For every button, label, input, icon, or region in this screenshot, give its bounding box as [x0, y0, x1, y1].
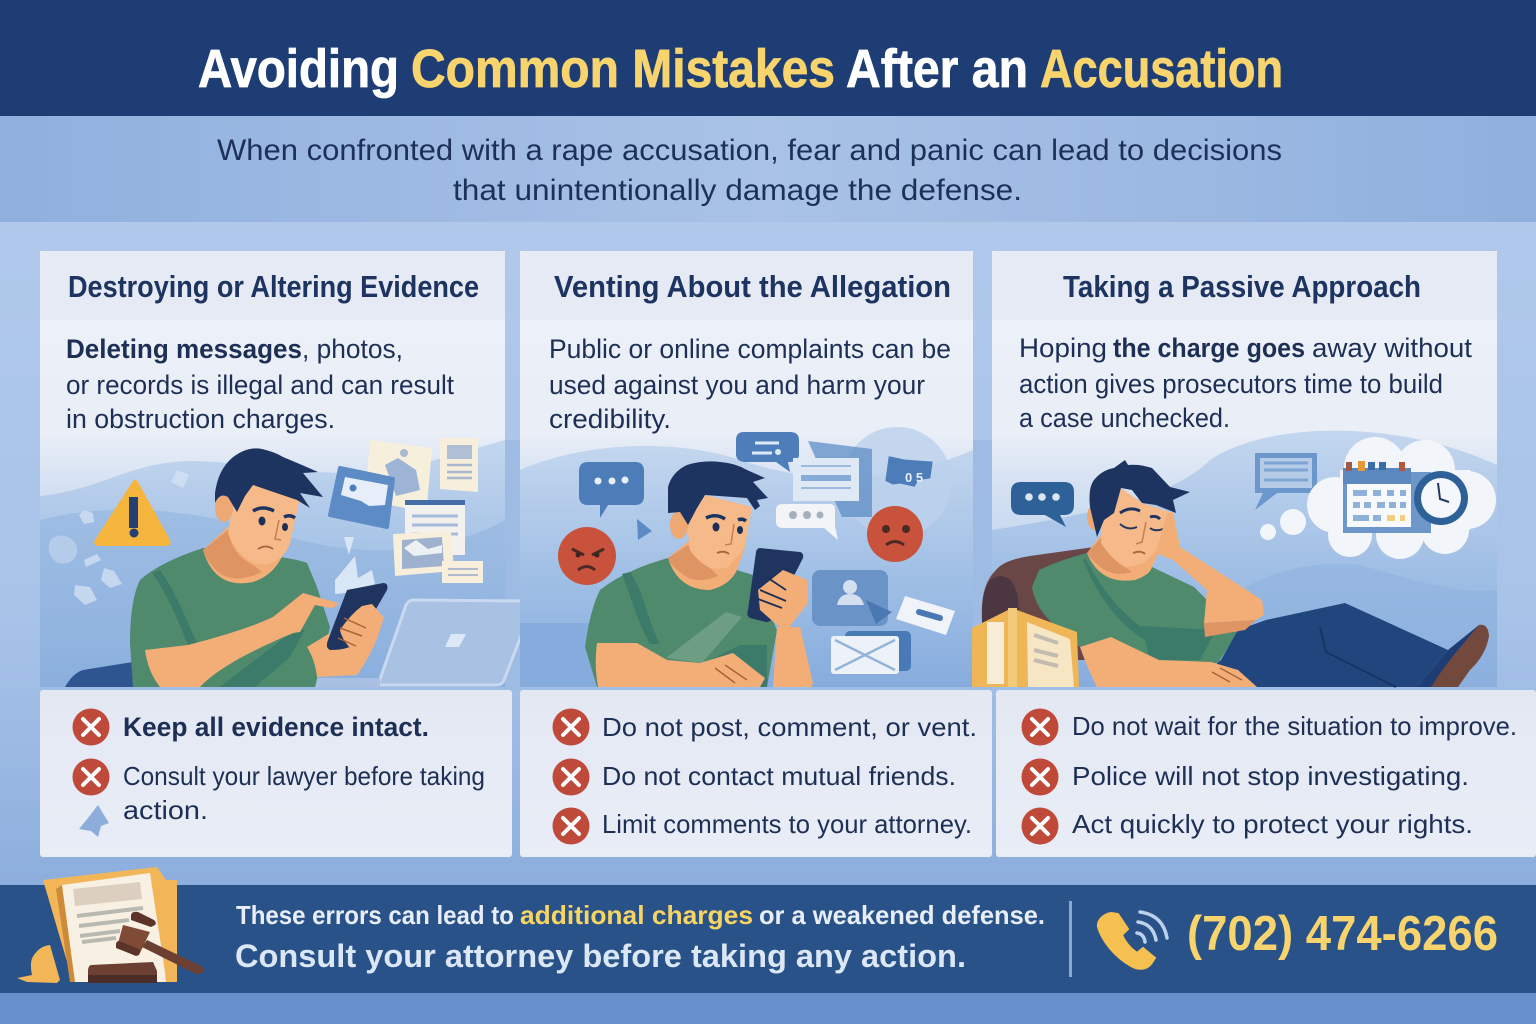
icon: cross	[552, 808, 590, 844]
body text	[1019, 333, 1472, 433]
icon: sad face	[867, 506, 923, 562]
action text	[123, 761, 485, 825]
icon: burst of fragments	[335, 537, 375, 594]
intro band	[0, 116, 1536, 222]
body text: , photos,	[302, 334, 403, 364]
person resting head on hand	[982, 460, 1489, 687]
panel: venting about the allegation	[520, 251, 973, 687]
icon: phone	[1098, 912, 1167, 969]
action text: Do not wait for the situation to improve.	[1072, 711, 1517, 741]
icon: cross	[1022, 708, 1058, 746]
action text: Police will not stop investigating.	[1072, 761, 1469, 791]
icon: small heart shape	[637, 519, 652, 540]
icon: legal document and gavel	[17, 867, 204, 983]
icon: warning triangle	[94, 480, 170, 546]
body text: used against you and harm your	[549, 370, 925, 400]
panel: second action list	[520, 690, 992, 857]
icon: cross	[1022, 758, 1058, 796]
icon: top message bubble	[736, 432, 799, 472]
body text: away without	[1312, 333, 1472, 363]
heading: Venting About the Allegation	[554, 269, 951, 304]
header band	[0, 0, 1536, 116]
icon: faded scrap	[79, 805, 109, 837]
icon: cross	[72, 758, 110, 796]
icon: text bubble glitch: 0 5	[905, 470, 923, 485]
icon: profile card	[812, 570, 892, 626]
icon: white bubble	[776, 504, 838, 540]
icon: cross	[1022, 808, 1058, 844]
panel: third action list	[996, 690, 1536, 857]
illustration backdrop	[40, 440, 505, 687]
title: Accusation	[1040, 39, 1283, 99]
footer message: or a weakened defense.	[759, 900, 1045, 930]
body text: the charge goes	[1113, 333, 1305, 363]
body text: or records is illegal and can result	[66, 370, 454, 400]
footer message: additional charges	[520, 900, 753, 930]
icon: cross	[552, 758, 590, 796]
title: After an	[846, 39, 1028, 99]
body text	[66, 334, 454, 434]
background circle	[842, 427, 952, 537]
body text: action gives prosecutors time to build	[1019, 369, 1443, 399]
icon: angry face	[558, 527, 616, 585]
body text	[549, 334, 951, 434]
footer message	[235, 900, 1045, 974]
icon: envelope	[831, 631, 911, 674]
action text: Act quickly to protect your rights.	[1072, 809, 1473, 839]
icon: cross	[72, 708, 110, 746]
action text: Consult your lawyer before taking	[123, 761, 485, 791]
body text: credibility.	[549, 404, 671, 434]
intro text: When confronted with a rape accusation, fear and panic can lead to decisions	[217, 134, 1282, 167]
icon: laptop	[272, 600, 533, 687]
icon: text bubble glitch	[887, 458, 931, 485]
body text: a case unchecked.	[1019, 403, 1230, 433]
divider	[1069, 901, 1072, 977]
footer message: These errors can lead to	[236, 900, 514, 930]
icon: message board	[1255, 453, 1317, 510]
icon: cross	[552, 708, 590, 746]
icon: chat bubble with dots	[579, 462, 644, 518]
title: Common Mistakes	[411, 39, 835, 99]
footer message: Consult your attorney before taking any action.	[235, 938, 966, 974]
body text: Public or online complaints can be	[549, 334, 951, 364]
heading: Taking a Passive Approach	[1063, 269, 1421, 304]
panel: taking a passive approach	[972, 251, 1497, 687]
heading: Destroying or Altering Evidence	[68, 269, 479, 304]
title	[198, 39, 1283, 99]
action text: action.	[123, 795, 208, 825]
panel: destroying or altering evidence	[40, 251, 533, 687]
intro text: that unintentionally damage the defense.	[453, 174, 1022, 207]
action text: Limit comments to your attorney.	[602, 809, 972, 839]
icon: clock	[1414, 471, 1468, 525]
illustration backdrop	[520, 446, 973, 687]
gutters beside illustrations	[505, 440, 992, 690]
icon: open book binder	[972, 608, 1079, 687]
floating paper scraps	[49, 470, 189, 605]
phone number: (702) 474-6266	[1187, 907, 1498, 961]
icon: minus card	[896, 596, 955, 635]
icon: media and documents	[330, 438, 483, 583]
icon: document window	[793, 441, 872, 517]
icon: thought cloud	[1260, 437, 1496, 559]
intro text	[217, 134, 1282, 207]
footer band	[0, 867, 1536, 1024]
panel: first action list	[40, 690, 512, 857]
body text: Deleting messages	[66, 334, 302, 364]
action text: Do not post, comment, or vent.	[602, 712, 977, 742]
illustration backdrop	[992, 431, 1497, 687]
person looking at phone	[585, 461, 813, 687]
body text: Hoping	[1019, 333, 1107, 363]
action text: Do not contact mutual friends.	[602, 761, 956, 791]
person with phone	[65, 448, 388, 687]
icon: chat bubble	[1011, 482, 1074, 527]
action text: Keep all evidence intact.	[123, 712, 429, 742]
title: Avoiding	[198, 39, 399, 99]
body text: in obstruction charges.	[66, 404, 335, 434]
